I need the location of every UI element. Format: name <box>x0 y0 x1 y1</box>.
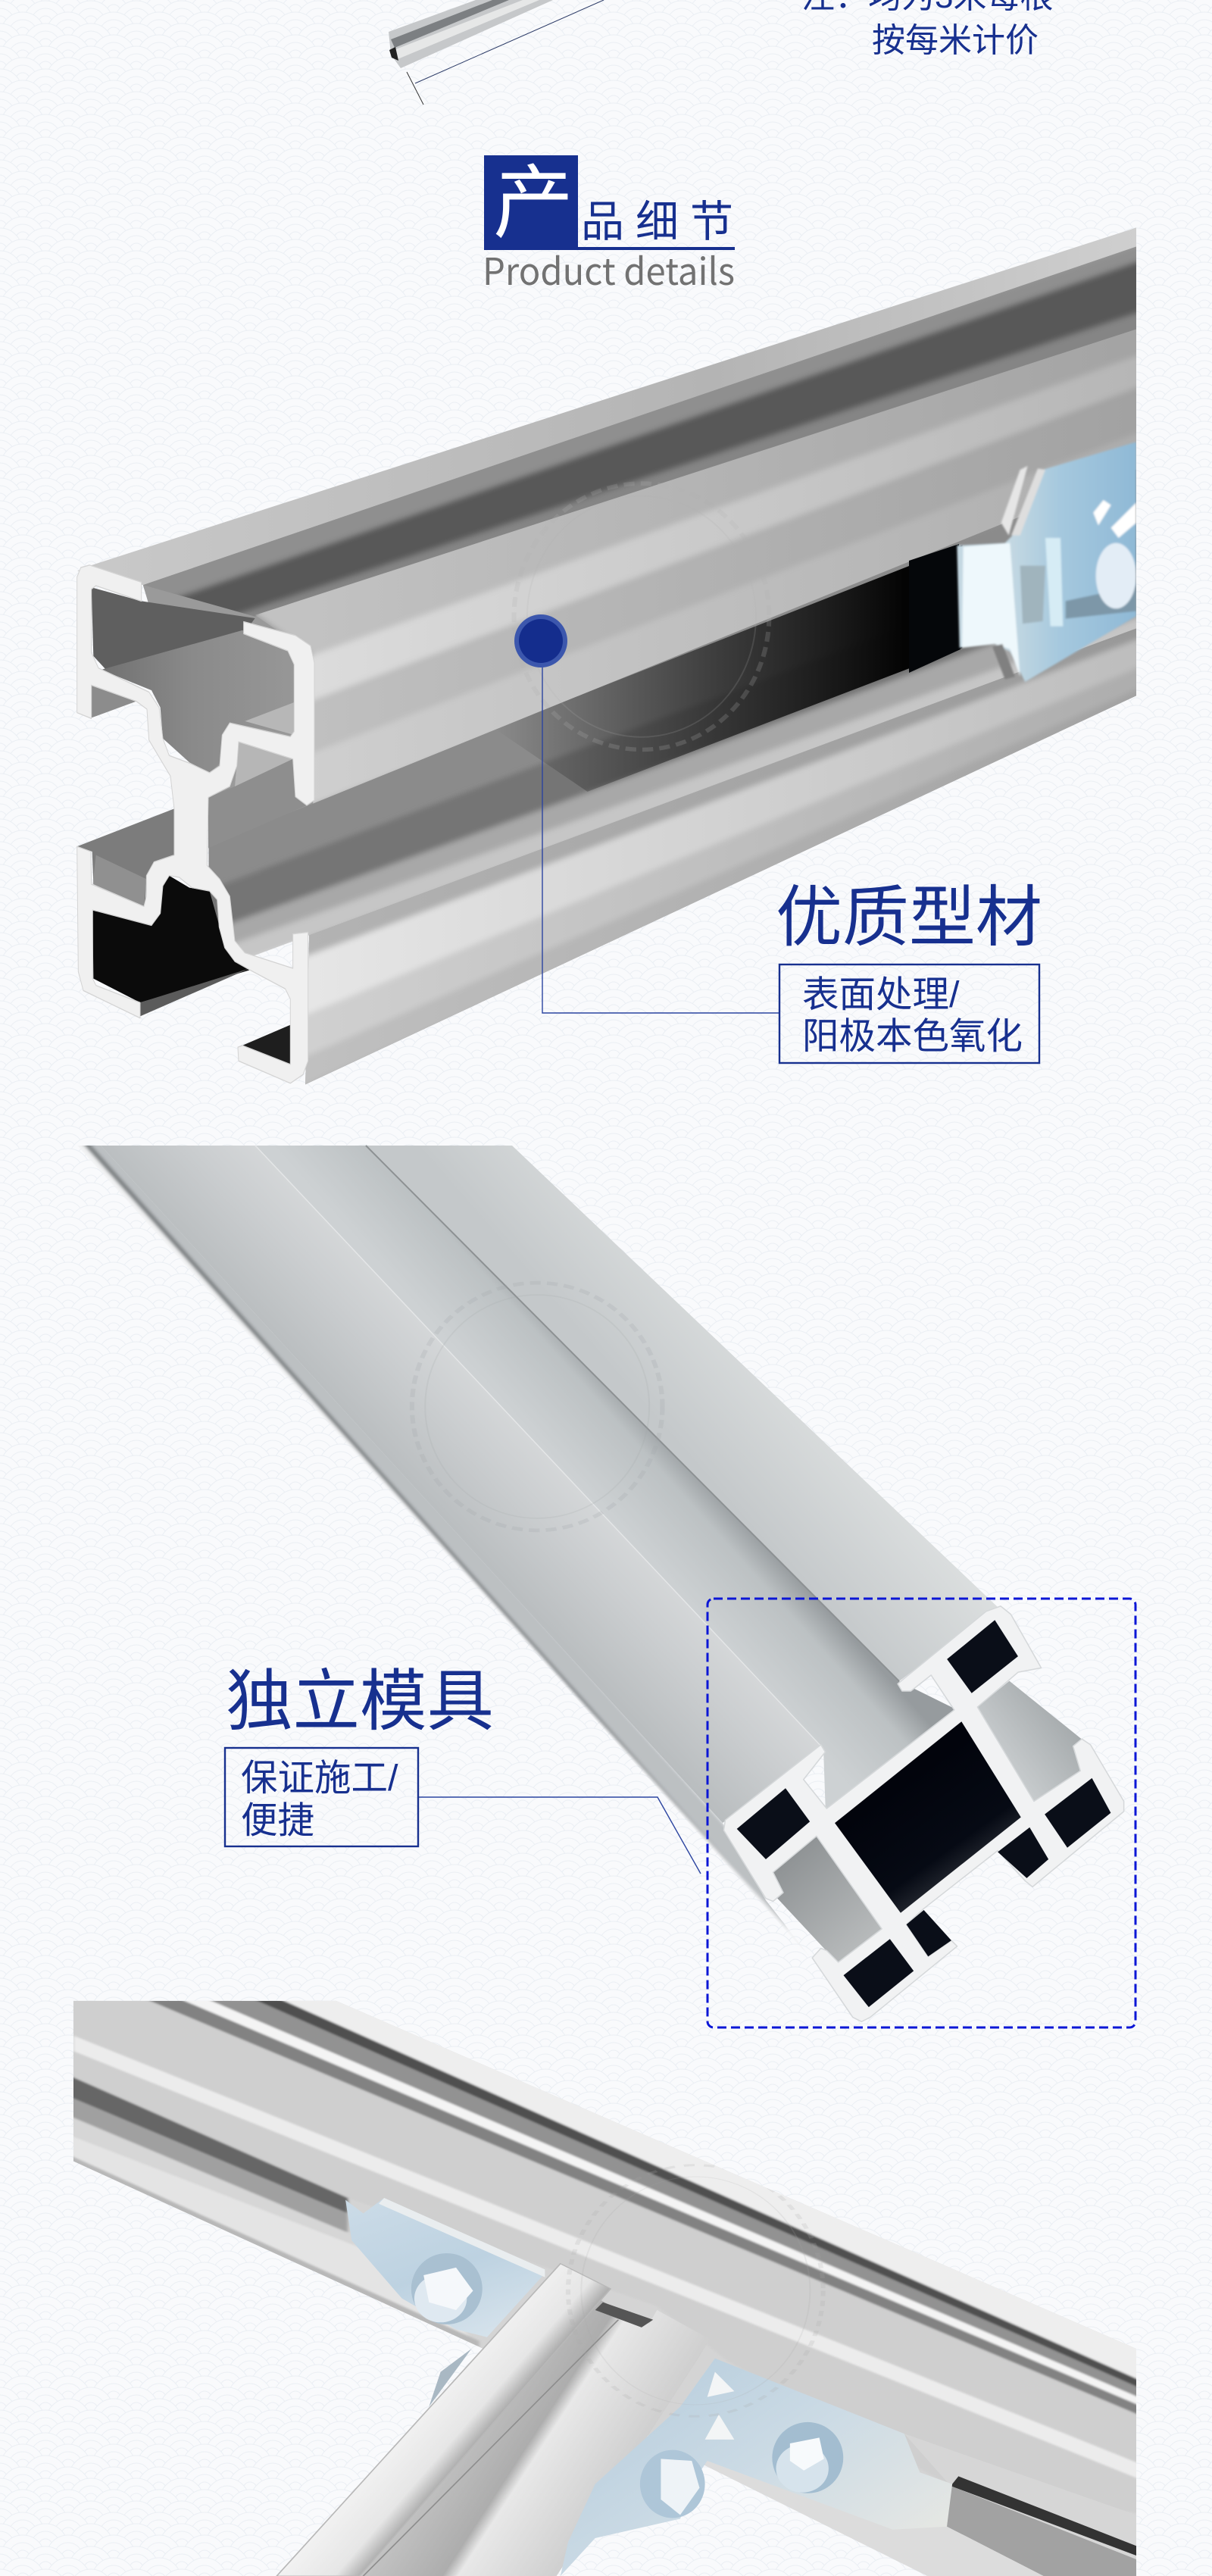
feature callout: independent mould <box>225 1664 701 1874</box>
leader line and marker <box>514 614 779 1013</box>
watermark seal <box>551 482 771 752</box>
section heading <box>483 155 745 296</box>
cross-section at the cut end <box>77 565 314 1083</box>
watermark seal <box>412 1283 662 1530</box>
small product render cropped from the previous section <box>389 0 604 105</box>
feature callout: quality profile <box>514 614 1042 1063</box>
watermark seal <box>568 2165 823 2416</box>
callout title: 独立模具 <box>226 1664 494 1739</box>
callout description box <box>225 1748 418 1846</box>
note: length and pricing: 按每米计价 <box>872 22 1039 59</box>
end cross-section <box>723 1606 1124 2021</box>
photo: profile end showing independent mould section <box>72 1140 1124 2021</box>
vertical beam <box>276 2264 710 2576</box>
dashed highlight around the cross-section <box>708 1599 1135 2027</box>
photo: T-joint with corner brackets <box>46 1993 1151 2576</box>
callout title: 优质型材 <box>776 880 1042 955</box>
bracket and bolt <box>909 424 1167 727</box>
callout description box: 便捷 <box>241 1800 314 1841</box>
callout description box: 表面处理/ <box>802 974 960 1015</box>
note: length and pricing <box>801 0 1053 59</box>
left bracket and bolt <box>345 2198 545 2337</box>
section heading: Product details <box>483 242 735 296</box>
callout description box: 保证施工/ <box>241 1758 398 1799</box>
section heading: 品细节 <box>581 198 745 246</box>
leader line <box>418 1797 701 1874</box>
photo: aluminium profile with bracket <box>77 228 1167 1093</box>
callout description box: 阳极本色氧化 <box>802 1016 1023 1057</box>
section heading: 产 <box>493 159 573 249</box>
right bracket and bolts <box>561 2359 952 2576</box>
callout description box <box>779 964 1039 1063</box>
main beam <box>46 1993 1151 2576</box>
